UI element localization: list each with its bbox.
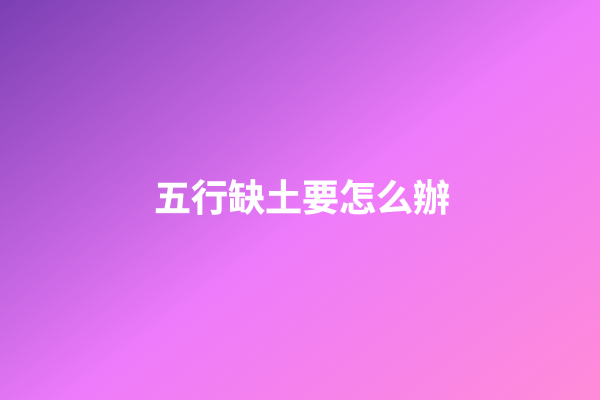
title: 五行缺土要怎么辦: [154, 178, 450, 219]
